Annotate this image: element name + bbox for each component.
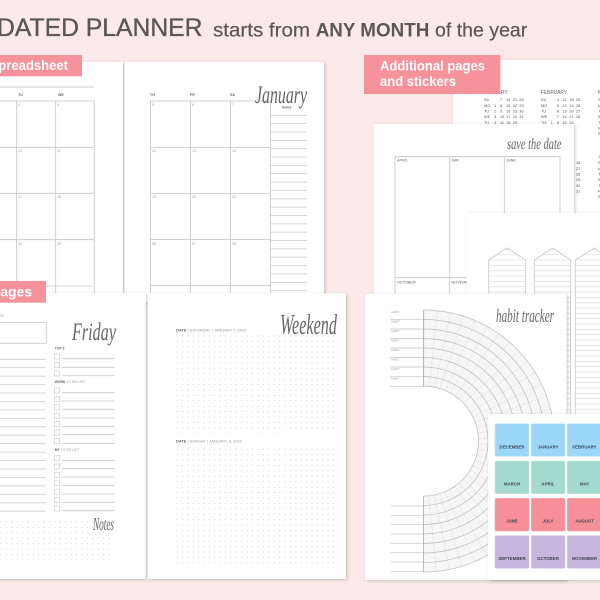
panel: year overview page: 4 <box>494 120 497 125</box>
panel: monthly calendar left page: 11 <box>57 149 61 153</box>
panel: save the date page: JUNE <box>506 159 516 163</box>
panel: year overview page: 21 <box>513 97 517 102</box>
panel: year overview page: 20 <box>569 109 574 114</box>
panel: year overview page: 28 <box>576 172 580 177</box>
panel: year overview page: 28 <box>519 97 524 102</box>
panel: year overview page: TU <box>541 109 546 114</box>
panel: year overview page: 14 <box>506 97 511 102</box>
panel: year overview page: SU <box>484 97 490 102</box>
panel: year overview page: TH <box>541 120 546 125</box>
panel: monthly calendar left page: 24 <box>18 242 22 246</box>
stickers row: red: AUGUST <box>575 519 594 524</box>
panel: year overview page: 14 <box>562 114 567 119</box>
panel: year overview page: 21 <box>569 114 574 119</box>
stickers row: purple: SEPTEMBER <box>498 556 526 561</box>
panel: year overview page: MO <box>541 103 547 108</box>
panel: year overview page: 2 <box>494 109 496 114</box>
label: pages <box>0 281 46 303</box>
stickers row: purple: NOVEMBER <box>572 556 598 561</box>
panel: monthly calendar left page: 10 <box>18 149 22 153</box>
panel: year overview page: 18 <box>506 120 510 125</box>
label: additional pages and stickers: Additional pages <box>380 58 485 74</box>
panel: monthly calendar left page: 3 <box>18 103 20 107</box>
panel: monthly calendar right page: 20 <box>192 195 196 199</box>
panel: monthly calendar right page: Notes <box>282 106 292 110</box>
panel: year overview page: 13 <box>562 109 567 114</box>
panel: year overview page: 25 <box>576 97 580 102</box>
panel: year overview page: 15 <box>576 160 580 165</box>
panel: year overview page: 7 <box>557 114 559 119</box>
stickers row: teal: MAY <box>580 482 589 487</box>
panel: tall tags page <box>467 213 600 428</box>
panel: monthly calendar right page: 27 <box>192 242 196 246</box>
panel: Weekend page: Weekend <box>280 310 338 341</box>
panel: monthly calendar right page: 19 <box>152 195 156 199</box>
panel: year overview page: 1 <box>551 120 553 125</box>
panel: year overview page: 7 <box>500 97 502 102</box>
panel: monthly calendar right page: January <box>255 82 308 109</box>
habit labels: HABIT <box>391 367 400 371</box>
panel: year overview page: 24 <box>513 114 518 119</box>
panel: year overview page: 8 <box>557 120 559 125</box>
panel: year overview page: 31 <box>519 114 524 119</box>
panel: year overview page: JANUARY <box>483 90 508 96</box>
panel: year overview page: 19 <box>569 103 574 108</box>
panel: year overview page: 3 <box>494 114 496 119</box>
panel: year overview page: 31 <box>576 189 580 194</box>
panel: Weekend page: DATE | SATURDAY | JANUARY 7, 2023 <box>176 328 247 332</box>
label: spreadsheet <box>0 55 82 76</box>
stickers row: teal: MARCH <box>504 482 520 487</box>
panel: year overview page: 4 <box>557 97 560 102</box>
semicircle habit chart <box>424 310 552 572</box>
panel: monthly calendar right page: FR <box>190 93 195 97</box>
stickers row: purple <box>495 536 600 568</box>
panel: monthly calendar right page: 7 <box>232 103 234 107</box>
panel: monthly calendar right page: 14 <box>232 149 236 153</box>
panel: year overview page: 23 <box>513 109 517 114</box>
panel: save the date page: APRIL <box>397 159 408 163</box>
panel: Weekend page <box>148 293 346 579</box>
stickers row: blue: DECEMBER <box>499 444 525 449</box>
stickers row: red <box>495 498 600 531</box>
panel: year overview page: 8 <box>500 103 502 108</box>
habit labels: HABIT <box>391 376 400 380</box>
panel: year overview page: 11 <box>500 120 504 125</box>
panel: monthly calendar left page: 17 <box>18 195 22 199</box>
panel: year overview page: WE <box>484 114 491 119</box>
panel: monthly calendar right page: SA <box>230 93 235 97</box>
stickers row: blue: JANUARY <box>537 444 559 449</box>
panel: year overview page: 10 <box>500 114 505 119</box>
title: DATED PLANNER <box>0 14 202 42</box>
title: ANY MONTH <box>316 20 429 42</box>
panel: monthly calendar right page: 26 <box>152 242 156 246</box>
habit labels: HABIT <box>391 339 400 343</box>
title: starts from <box>213 20 310 42</box>
stickers row: purple: OCTOBER <box>537 556 560 561</box>
habit labels: HABIT <box>391 357 400 361</box>
habit labels <box>391 310 400 380</box>
panel: year overview page: 16 <box>506 109 510 114</box>
habit labels: HABIT <box>391 320 400 324</box>
panel: month stickers sheet <box>488 414 600 580</box>
panel: monthly calendar right page <box>124 62 324 302</box>
panel: year overview page: 27 <box>576 109 580 114</box>
panel: year overview page: 25 <box>513 120 517 125</box>
panel: Friday daily page: WORK TO DO LIST <box>55 380 85 384</box>
panel: year overview page: 26 <box>576 103 580 108</box>
habit labels: HABIT <box>391 329 400 333</box>
panel: monthly calendar right page: 5 <box>152 103 154 107</box>
panel: year overview page: WE <box>541 114 548 119</box>
panel: monthly calendar left page: 18 <box>57 195 61 199</box>
panel: monthly calendar right page: TH <box>150 93 155 97</box>
panel: year overview page: 15 <box>562 120 567 125</box>
stickers row: teal <box>495 461 600 494</box>
panel: monthly calendar left page: WE <box>58 93 64 97</box>
panel: save the date page: OCTOBER <box>397 280 416 284</box>
panel: year overview page: MO <box>484 103 490 108</box>
panel: Friday daily page: MY TO DO LIST <box>55 448 79 452</box>
panel: year overview page: 12 <box>562 103 567 108</box>
panel: Friday daily page: Notes <box>92 514 114 534</box>
panel: year overview page: 11 <box>562 97 566 102</box>
panel: monthly calendar right page: 13 <box>192 149 196 153</box>
panel: year overview page: 15 <box>506 103 510 108</box>
panel: monthly calendar left page <box>0 62 123 302</box>
panel: year overview page <box>453 60 600 220</box>
panel: year overview page: TH <box>484 120 489 125</box>
panel: monthly calendar left page: 4 <box>57 103 59 107</box>
habit labels: HABIT <box>391 348 400 352</box>
panel: year overview page: 22 <box>569 120 574 125</box>
habit labels: HABIT <box>391 310 400 314</box>
panel: Friday daily page: Friday <box>71 319 117 346</box>
panel: save the date page <box>374 124 574 304</box>
panel: Friday daily page: TOP 3 <box>55 346 64 350</box>
panel: year overview page: J <box>598 154 600 159</box>
panel: year overview page: 22 <box>513 103 517 108</box>
panel: year overview page: 30 <box>576 183 581 188</box>
label: additional pages and stickers: and stickers <box>380 73 456 89</box>
panel: monthly calendar right page: 21 <box>232 195 236 199</box>
panel: monthly calendar right page: 12 <box>152 149 156 153</box>
stickers row: red: JUNE <box>506 519 518 524</box>
panel: monthly calendar left page: TU <box>18 93 23 97</box>
panel: save the date page: NOVEMBER <box>452 280 473 284</box>
panel: year overview page: 17 <box>506 114 510 119</box>
panel: year overview page: 29 <box>519 103 524 108</box>
panel: save the date page: save the date <box>507 136 562 153</box>
title <box>0 14 528 42</box>
panel: year overview page: 29 <box>576 177 580 182</box>
panel: Friday daily page <box>0 293 146 579</box>
tag outlines <box>489 248 600 425</box>
panel: year overview page: SU <box>541 97 547 102</box>
panel: year overview page: 6 <box>557 109 559 114</box>
panel: monthly calendar right page: 6 <box>192 103 194 107</box>
stickers row: teal: APRIL <box>541 482 555 487</box>
panel: year overview page: 1 <box>494 103 496 108</box>
panel: year overview page: 9 <box>500 109 502 114</box>
panel: monthly calendar right page: 28 <box>232 242 236 246</box>
panel: year overview page: FEBRUARY <box>541 90 567 96</box>
panel: monthly calendar left page: 25 <box>57 242 61 246</box>
stickers row: blue <box>495 424 600 456</box>
panel: year overview page: TU <box>484 109 489 114</box>
panel: Weekend page: DATE | SUNDAY | JANUARY 8, 2023 <box>176 440 242 444</box>
panel: save the date page: MAY <box>452 159 460 163</box>
label: additional pages and stickers <box>364 55 500 94</box>
panel: year overview page: 18 <box>569 97 574 102</box>
stickers row: blue: FEBRUARY <box>572 444 597 449</box>
panel: year overview page: 27 <box>576 166 580 171</box>
panel: year overview page: 28 <box>576 114 580 119</box>
title: of the year <box>435 20 528 42</box>
panel: habit tracker page: habit tracker <box>496 306 554 327</box>
panel: year overview page: 5 <box>557 103 559 108</box>
panel: habit tracker page <box>364 294 570 582</box>
panel: year overview page: 30 <box>519 109 524 114</box>
habit row lines <box>390 319 424 572</box>
stickers row: red: JULY <box>543 519 553 524</box>
